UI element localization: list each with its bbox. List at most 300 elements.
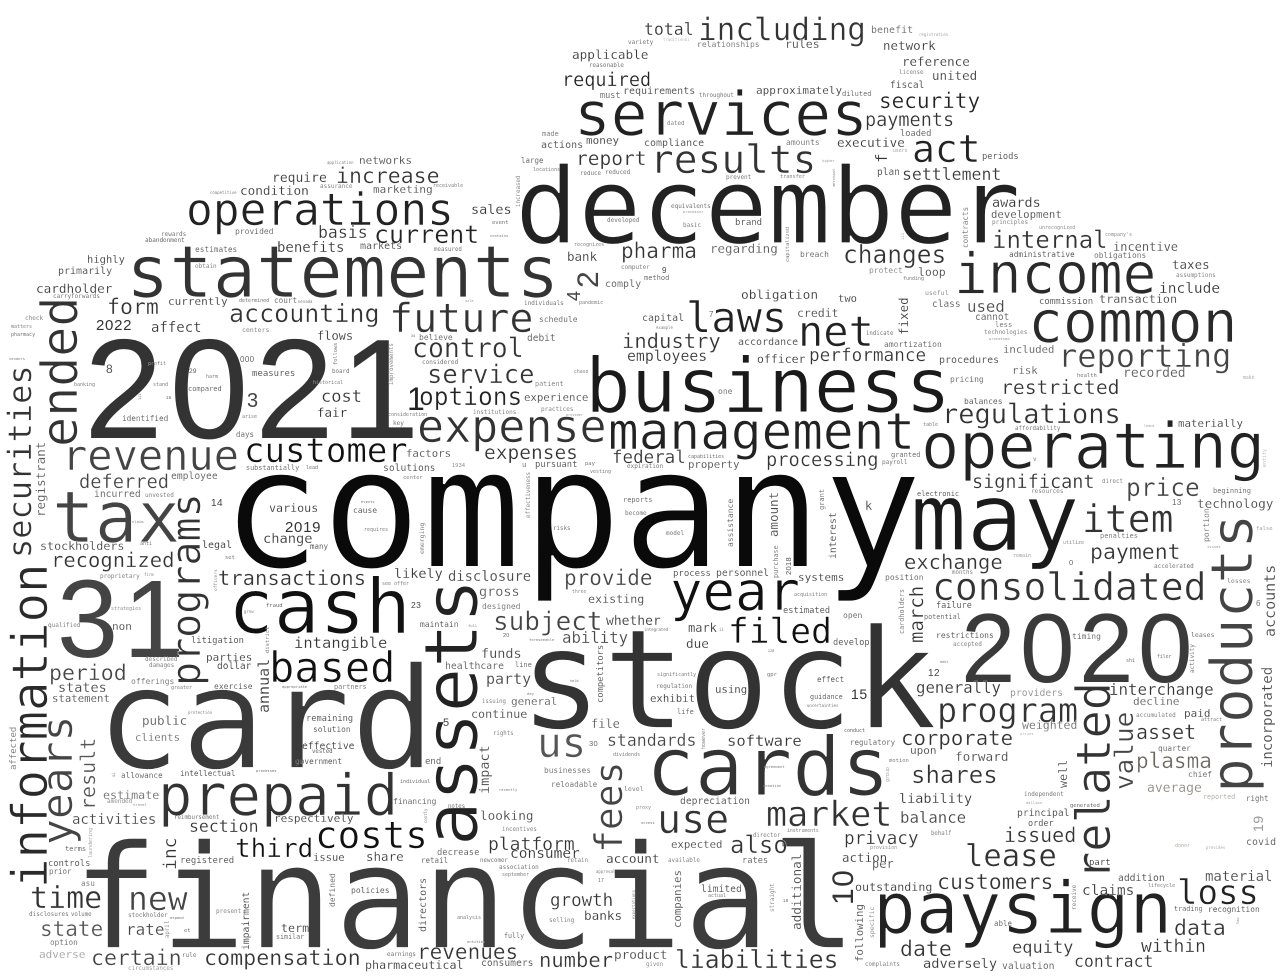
small words: upper right: incentive <box>1113 240 1178 254</box>
small words: centre right: model <box>666 530 684 537</box>
small words: upper centre: computer <box>621 264 650 271</box>
word: statements: statements <box>126 230 559 314</box>
small words: lower centre: selling <box>549 917 575 924</box>
small words: lower right: corporate <box>901 726 1013 750</box>
word: services: services <box>574 79 868 150</box>
small words: centre: 20 <box>503 633 510 639</box>
small words: top: reasonable <box>589 63 624 69</box>
small words: middle left: days <box>236 430 254 439</box>
small words: upper left: profit <box>148 361 166 367</box>
small words: centre: foreseeable <box>529 637 555 642</box>
small words: middle right: 13 <box>1172 498 1182 507</box>
small words: top: higher <box>822 159 835 163</box>
small words: lower right: customers <box>937 870 1054 895</box>
small words: top: applicable <box>572 47 648 62</box>
small words: centre right: regulation <box>656 683 693 690</box>
small words: lower centre: 10 <box>827 869 860 905</box>
small words: middle left: statement <box>52 692 110 705</box>
small words: centre right: march <box>906 586 928 643</box>
small words: lower centre: consumer <box>510 846 580 862</box>
small words: upper left: estimates <box>195 245 237 254</box>
small words: top: loaded <box>900 129 931 139</box>
small words: lower left: option <box>50 938 78 947</box>
small words: middle right: significant <box>972 472 1095 493</box>
small words: centre right: systems <box>798 571 844 584</box>
small words: top: traditional <box>663 37 690 42</box>
small words: lower left: stockholder <box>128 912 168 919</box>
small words: lower left: share <box>366 849 404 864</box>
small words: lower left: processes <box>256 768 277 773</box>
small words: upper left: condition <box>240 183 309 198</box>
word: reporting: reporting <box>1058 337 1231 375</box>
small words: lower left: issue <box>313 852 345 864</box>
small words: middle left: proprietary <box>100 573 140 580</box>
small words: lower centre: agreement <box>764 764 785 769</box>
small words: lower left: reimbursement <box>174 815 219 821</box>
small words: lower left: result <box>76 738 100 810</box>
small words: upper centre: marketing <box>373 183 433 196</box>
small words: lower centre: product <box>614 947 667 962</box>
small words: middle left: period <box>49 661 127 686</box>
word: costs: costs <box>315 813 428 857</box>
small words: lower centre: given <box>646 962 663 968</box>
small words: upper right centre: processor <box>683 209 704 214</box>
small words: middle right: portion <box>1202 508 1211 542</box>
small words: centre: healthcare <box>445 661 504 672</box>
small words: upper left: carryforwards <box>53 293 100 300</box>
small words: middle left: 2019 <box>285 519 321 536</box>
small words: lower centre: retain <box>567 858 588 864</box>
small words: upper centre: 1 <box>407 381 426 417</box>
small words: lower left: controls <box>48 859 90 869</box>
small words: top: license <box>899 70 924 76</box>
small words: lower centre: growth <box>550 891 613 911</box>
small words: upper right centre: basic <box>683 222 701 229</box>
small words: centre: partners <box>334 683 367 691</box>
small words: upper right: included <box>1003 343 1054 356</box>
small words: middle right: direct <box>1102 479 1123 485</box>
small words: lower right: liability <box>899 791 972 807</box>
small words: upper right: transaction <box>1099 292 1177 306</box>
word: third: third <box>235 834 313 864</box>
small words: middle left: annual <box>255 659 273 713</box>
small words: middle right: false <box>1256 526 1273 532</box>
word: prepaid: prepaid <box>158 763 398 829</box>
small words: lower left: protection <box>188 710 213 715</box>
small words: upper right centre: two <box>838 293 857 305</box>
small words: upper centre: experience <box>524 391 588 404</box>
small words: top: f <box>872 153 891 163</box>
small words: upper centre: follows <box>333 343 339 365</box>
small words: middle left: recognized <box>51 548 174 572</box>
small words: upper left: primarily <box>58 266 112 277</box>
small words: middle right: covid <box>1246 837 1276 848</box>
small words: upper left: rewards <box>161 231 187 238</box>
small words: upper centre: pharma <box>621 239 697 263</box>
small words: middle left: employee <box>171 471 218 482</box>
small words: centre right: estimated <box>783 606 830 616</box>
small words: upper left: obtain <box>195 263 217 270</box>
small words: lower left: terms <box>65 845 86 853</box>
small words: middle right: activity <box>1189 644 1196 673</box>
word: revenue: revenue <box>62 431 239 480</box>
small words: middle right: beginning <box>1213 487 1251 495</box>
small words: centre right <box>612 448 959 716</box>
small words: upper right: taxes <box>1172 257 1210 272</box>
small words: upper right centre: credit <box>797 306 839 320</box>
small words: lower left: retail <box>421 856 448 865</box>
small words: lower left: inc <box>160 837 181 870</box>
small words: centre: likely <box>394 566 443 582</box>
small words: upper right: administrative <box>1009 250 1075 259</box>
small words: upper right: affordability <box>1015 426 1061 432</box>
small words: lower right <box>842 726 1272 972</box>
small words: upper centre: institutions <box>473 409 517 416</box>
small words: top: payments <box>865 110 954 131</box>
small words: top: periods <box>982 152 1019 162</box>
small words: middle right: exchange <box>904 550 1003 574</box>
small words: upper right centre: breach <box>800 250 829 259</box>
small words: lower right: law <box>1236 917 1240 924</box>
small words: top: diluted <box>842 90 872 98</box>
small words: middle right: average <box>1147 781 1202 796</box>
small words: upper centre: considered <box>422 359 459 366</box>
small words: upper left: highly <box>87 254 125 266</box>
small words: lower right: independent <box>1024 791 1064 798</box>
small words: upper left: nevada <box>298 299 313 304</box>
small words: lower centre: analysis <box>457 915 481 921</box>
small words: lower left: april <box>165 921 171 938</box>
small words: upper right: development <box>991 208 1062 221</box>
small words: upper right centre: industry <box>622 329 721 353</box>
small words: centre: 1934 <box>452 463 465 469</box>
small words: centre: pay <box>585 461 596 467</box>
small words: lower centre: standards <box>607 731 696 750</box>
word: 2020: 2020 <box>961 593 1197 703</box>
small words: centre: three <box>572 589 587 595</box>
small words: middle left: states <box>58 680 107 696</box>
small words: top: rules <box>785 37 820 51</box>
small words: middle right: issues <box>1207 544 1221 549</box>
small words: lower left: certain <box>91 946 182 971</box>
small words: centre right: open <box>843 611 862 620</box>
small words: centre right: debt <box>940 660 948 664</box>
small words: centre right: significantly <box>657 672 696 678</box>
small words: centre right: uncertainties <box>807 703 839 708</box>
small words: centre right: develop <box>833 638 870 648</box>
small words: top: reference <box>902 54 970 69</box>
small words: middle right: accepted <box>953 641 982 648</box>
small words: lower left: remaining <box>306 714 353 724</box>
small words: middle right: interchange <box>1109 680 1214 699</box>
small words: lower left: affected <box>9 727 19 770</box>
small words: upper centre: provider <box>566 413 583 417</box>
word: operations: operations <box>186 185 454 236</box>
small words: lower centre: expected <box>671 838 722 851</box>
small words: lower centre: donation <box>763 783 781 788</box>
small words: centre: funds <box>481 646 522 662</box>
word: 2021: 2021 <box>84 310 426 469</box>
small words: lower left: adverse <box>39 948 85 961</box>
small words: upper centre: chase <box>574 369 589 375</box>
small words: middle left: deferred <box>79 472 169 493</box>
small words: lower left: allowance <box>121 771 163 780</box>
small words: upper left: 111 <box>137 393 142 400</box>
small words: centre right: exhibit <box>650 692 695 705</box>
small words: lower centre: 17 <box>598 878 604 884</box>
word: company: company <box>221 413 923 607</box>
small words: lower right: claims <box>1082 883 1134 899</box>
small words: centre: designed <box>482 602 521 611</box>
small words: upper right centre: one <box>718 387 733 396</box>
small words: middle right: v <box>1033 456 1037 463</box>
small words: centre right: reports <box>623 496 653 504</box>
small words: lower centre: expectations <box>631 890 636 919</box>
small words: lower right: lifecycle <box>1148 883 1175 889</box>
small words: top: prevent <box>726 174 752 181</box>
small words: top: throughout <box>699 93 734 99</box>
small words: centre: ability <box>562 628 628 647</box>
small words: lower left: pharmaceutical <box>365 958 464 972</box>
small words: top: increased <box>516 176 522 207</box>
small words: upper right centre: regarding <box>710 241 778 256</box>
small words: lower centre: instruments <box>787 828 819 834</box>
word: operating: operating <box>921 409 1265 483</box>
small words: centre right: due <box>686 636 709 651</box>
small words: upper right: risk <box>1012 364 1038 377</box>
small words: middle right: months <box>952 570 973 576</box>
word: based: based <box>269 643 395 692</box>
small words: upper left: require <box>272 171 327 186</box>
small words: top <box>516 12 1019 207</box>
small words: lower right: conduct <box>844 728 865 734</box>
small words: top: dated <box>667 121 684 127</box>
small words: centre right: capabilities <box>688 454 724 460</box>
small words: upper left <box>9 171 380 423</box>
word: related: related <box>1067 682 1122 880</box>
small words: lower left: financing <box>393 797 437 806</box>
small words: centre right: 15 <box>851 686 868 702</box>
small words: top: united <box>932 68 977 83</box>
small words: centre: u <box>522 461 526 469</box>
small words: middle right: providers <box>1010 688 1063 699</box>
small words: lower right: motion <box>889 758 909 764</box>
small words: middle right <box>904 449 1279 850</box>
small words: top: large <box>521 156 544 165</box>
small words: lower centre: software <box>727 732 802 750</box>
small words: centre right: payroll <box>882 459 908 466</box>
word: lease: lease <box>965 839 1057 874</box>
small words: middle right: timing <box>1072 632 1101 641</box>
small words: centre: line <box>515 661 532 669</box>
word: income: income <box>954 242 1156 307</box>
small words: upper centre: 34 <box>411 334 415 338</box>
small words: centre: pursuant <box>535 460 577 470</box>
small words: lower centre: number <box>539 948 613 972</box>
small words: upper right centre: 7 <box>709 310 714 319</box>
small words: centre: day <box>527 691 535 696</box>
word: results: results <box>650 137 816 183</box>
small words: lower left: circumstances <box>128 966 173 972</box>
small words: centre: events <box>361 499 375 504</box>
word: card: card <box>96 638 436 802</box>
small words: upper left: matters <box>11 324 32 330</box>
small words: lower right: able <box>994 919 1013 928</box>
small words: centre: effectiveness <box>526 472 532 518</box>
small words: upper left: historical <box>313 380 343 386</box>
small words: middle left: greater <box>171 685 192 691</box>
small words: centre right: acquisition <box>794 592 827 598</box>
small words: lower left: disclosures <box>29 911 69 918</box>
small words: middle left: incurred <box>94 489 141 500</box>
small words: upper left: measures <box>252 369 295 379</box>
small words: lower left: respectively <box>274 812 354 825</box>
small words: upper right: processed <box>989 336 1010 341</box>
small words: lower right: well <box>1056 760 1070 788</box>
small words: centre right: electronic <box>917 490 959 498</box>
small words: upper left: banking <box>74 382 95 388</box>
word: future: future <box>389 296 534 342</box>
small words: middle right: weighted <box>1022 718 1077 732</box>
small words: lower right: shares <box>911 761 998 789</box>
small words: middle left: change <box>263 531 312 547</box>
small words: lower right: issued <box>1004 823 1076 847</box>
small words: centre: file <box>591 717 620 731</box>
small words: upper centre: options <box>419 382 522 411</box>
small words: upper centre: sales <box>471 202 512 218</box>
small words: middle right: 6 <box>1256 599 1261 608</box>
small words: centre: continue <box>471 707 527 721</box>
word: net: net <box>798 307 874 356</box>
small words: upper centre: sale <box>465 299 473 303</box>
small words: centre: factors <box>406 447 451 460</box>
small words: middle right: losses <box>1227 577 1251 585</box>
small words: lower right: behalf <box>931 831 952 837</box>
small words: upper right centre: brand <box>735 218 762 228</box>
small words: middle left: legal <box>202 540 232 551</box>
small words: lower left: activities <box>72 812 156 828</box>
small words: middle right: asset <box>1136 720 1196 744</box>
small words: upper centre: comply <box>605 279 641 290</box>
small words: upper left: arise <box>242 414 257 420</box>
small words: middle right: entity <box>1262 449 1268 467</box>
small words: centre right: using <box>715 683 747 696</box>
small words: upper centre: improvements <box>389 343 395 385</box>
small words: upper centre: fair <box>317 405 348 420</box>
small words: lower right: addition <box>1118 873 1165 884</box>
small words: lower left: effective <box>302 741 355 752</box>
small words: lower left: earnings <box>387 951 416 958</box>
small words: top: required <box>562 70 651 91</box>
small words: upper centre: assurance <box>320 183 353 190</box>
small words: middle right: paid <box>1184 707 1210 720</box>
small words: centre right: 2018 <box>784 557 793 575</box>
small words: centre right: 128 <box>768 649 774 653</box>
small words: lower centre: liabilities <box>675 945 838 974</box>
small words: centre right: property <box>688 458 740 471</box>
small words: middle right: provides <box>1206 845 1226 850</box>
small words: lower left: intellectual <box>180 769 236 778</box>
small words: centre right: 12 <box>928 668 940 679</box>
small words: upper left: check <box>25 315 43 322</box>
small words: upper right: make <box>1243 375 1255 381</box>
small words: top: amounts <box>786 138 820 147</box>
small words: middle right: accelerated <box>1154 563 1194 570</box>
small words: middle left: anti <box>140 541 152 547</box>
small words: upper right centre: table <box>923 422 938 428</box>
small words: centre: expenses <box>484 441 578 464</box>
small words: top: must <box>600 91 620 101</box>
small words: lower left: revenues <box>417 940 518 964</box>
small words: upper left: pharmacy <box>11 332 35 338</box>
small words: centre: offer <box>394 581 409 587</box>
small words: centre: risks <box>553 526 570 532</box>
small words: lower centre: association <box>499 864 539 871</box>
small words: middle left: registrant <box>33 442 48 517</box>
small words: top: reduce <box>580 171 601 177</box>
small words: middle left: strategies <box>111 606 141 612</box>
small words: centre: 23 <box>411 600 421 610</box>
small words: lower left: directors <box>418 878 429 932</box>
small words: upper left: 29 <box>189 368 197 375</box>
word: time: time <box>30 881 102 916</box>
small words: middle right: restrictions <box>936 631 994 640</box>
small words: centre: general <box>511 695 557 708</box>
small words: lower right: order <box>1028 819 1054 829</box>
small words: middle left: litigation <box>191 636 244 646</box>
small words: lower left: rate <box>126 920 165 939</box>
small words: upper centre: practices <box>541 406 574 413</box>
small words: lower left: et <box>184 928 191 934</box>
small words: centre: issuing <box>482 699 506 705</box>
small words: middle left: substantially <box>246 464 299 472</box>
small words: top: benefit <box>871 25 913 36</box>
small words: top: security <box>879 89 980 113</box>
word: assets: assets <box>409 579 495 846</box>
small words: upper left: vendors <box>9 356 25 361</box>
word: use: use <box>657 797 729 843</box>
word: tax: tax <box>52 476 180 559</box>
small words: middle left: fraud <box>266 603 283 609</box>
small words: top: approximately <box>756 84 842 97</box>
small words: top: merchant <box>831 169 836 187</box>
small words: lower centre: september <box>502 872 529 878</box>
small words: centre right: become <box>625 510 647 517</box>
small words: upper left: 3 <box>247 390 259 412</box>
small words: centre right: assistance <box>726 499 735 547</box>
small words: upper centre: contains <box>490 233 508 238</box>
small words: lower centre <box>425 728 860 974</box>
small words: upper right centre: protect <box>869 266 903 275</box>
small words: upper right centre: equivalents <box>671 203 711 210</box>
small words: upper right centre: obligation <box>741 288 818 303</box>
small words: lower left: present <box>216 908 242 915</box>
small words: lower centre: companies <box>671 870 684 928</box>
small words: lower left: similar <box>276 933 304 941</box>
small words: upper right centre: procedures <box>939 355 999 366</box>
small words: upper right: unrecognized <box>1039 225 1075 231</box>
small words: middle left: lead <box>306 465 318 471</box>
small words: lower centre: impact <box>477 745 493 794</box>
small words: upper centre <box>317 154 697 427</box>
small words: lower right: generated <box>1070 803 1100 809</box>
small words: lower left <box>9 710 518 972</box>
small words: upper right: loans <box>1144 424 1155 428</box>
small words: upper right: health <box>1077 373 1097 379</box>
small words: upper right centre: performance <box>809 346 926 366</box>
small words: middle right: price <box>1126 473 1200 502</box>
small words: middle left: claim <box>132 519 144 524</box>
